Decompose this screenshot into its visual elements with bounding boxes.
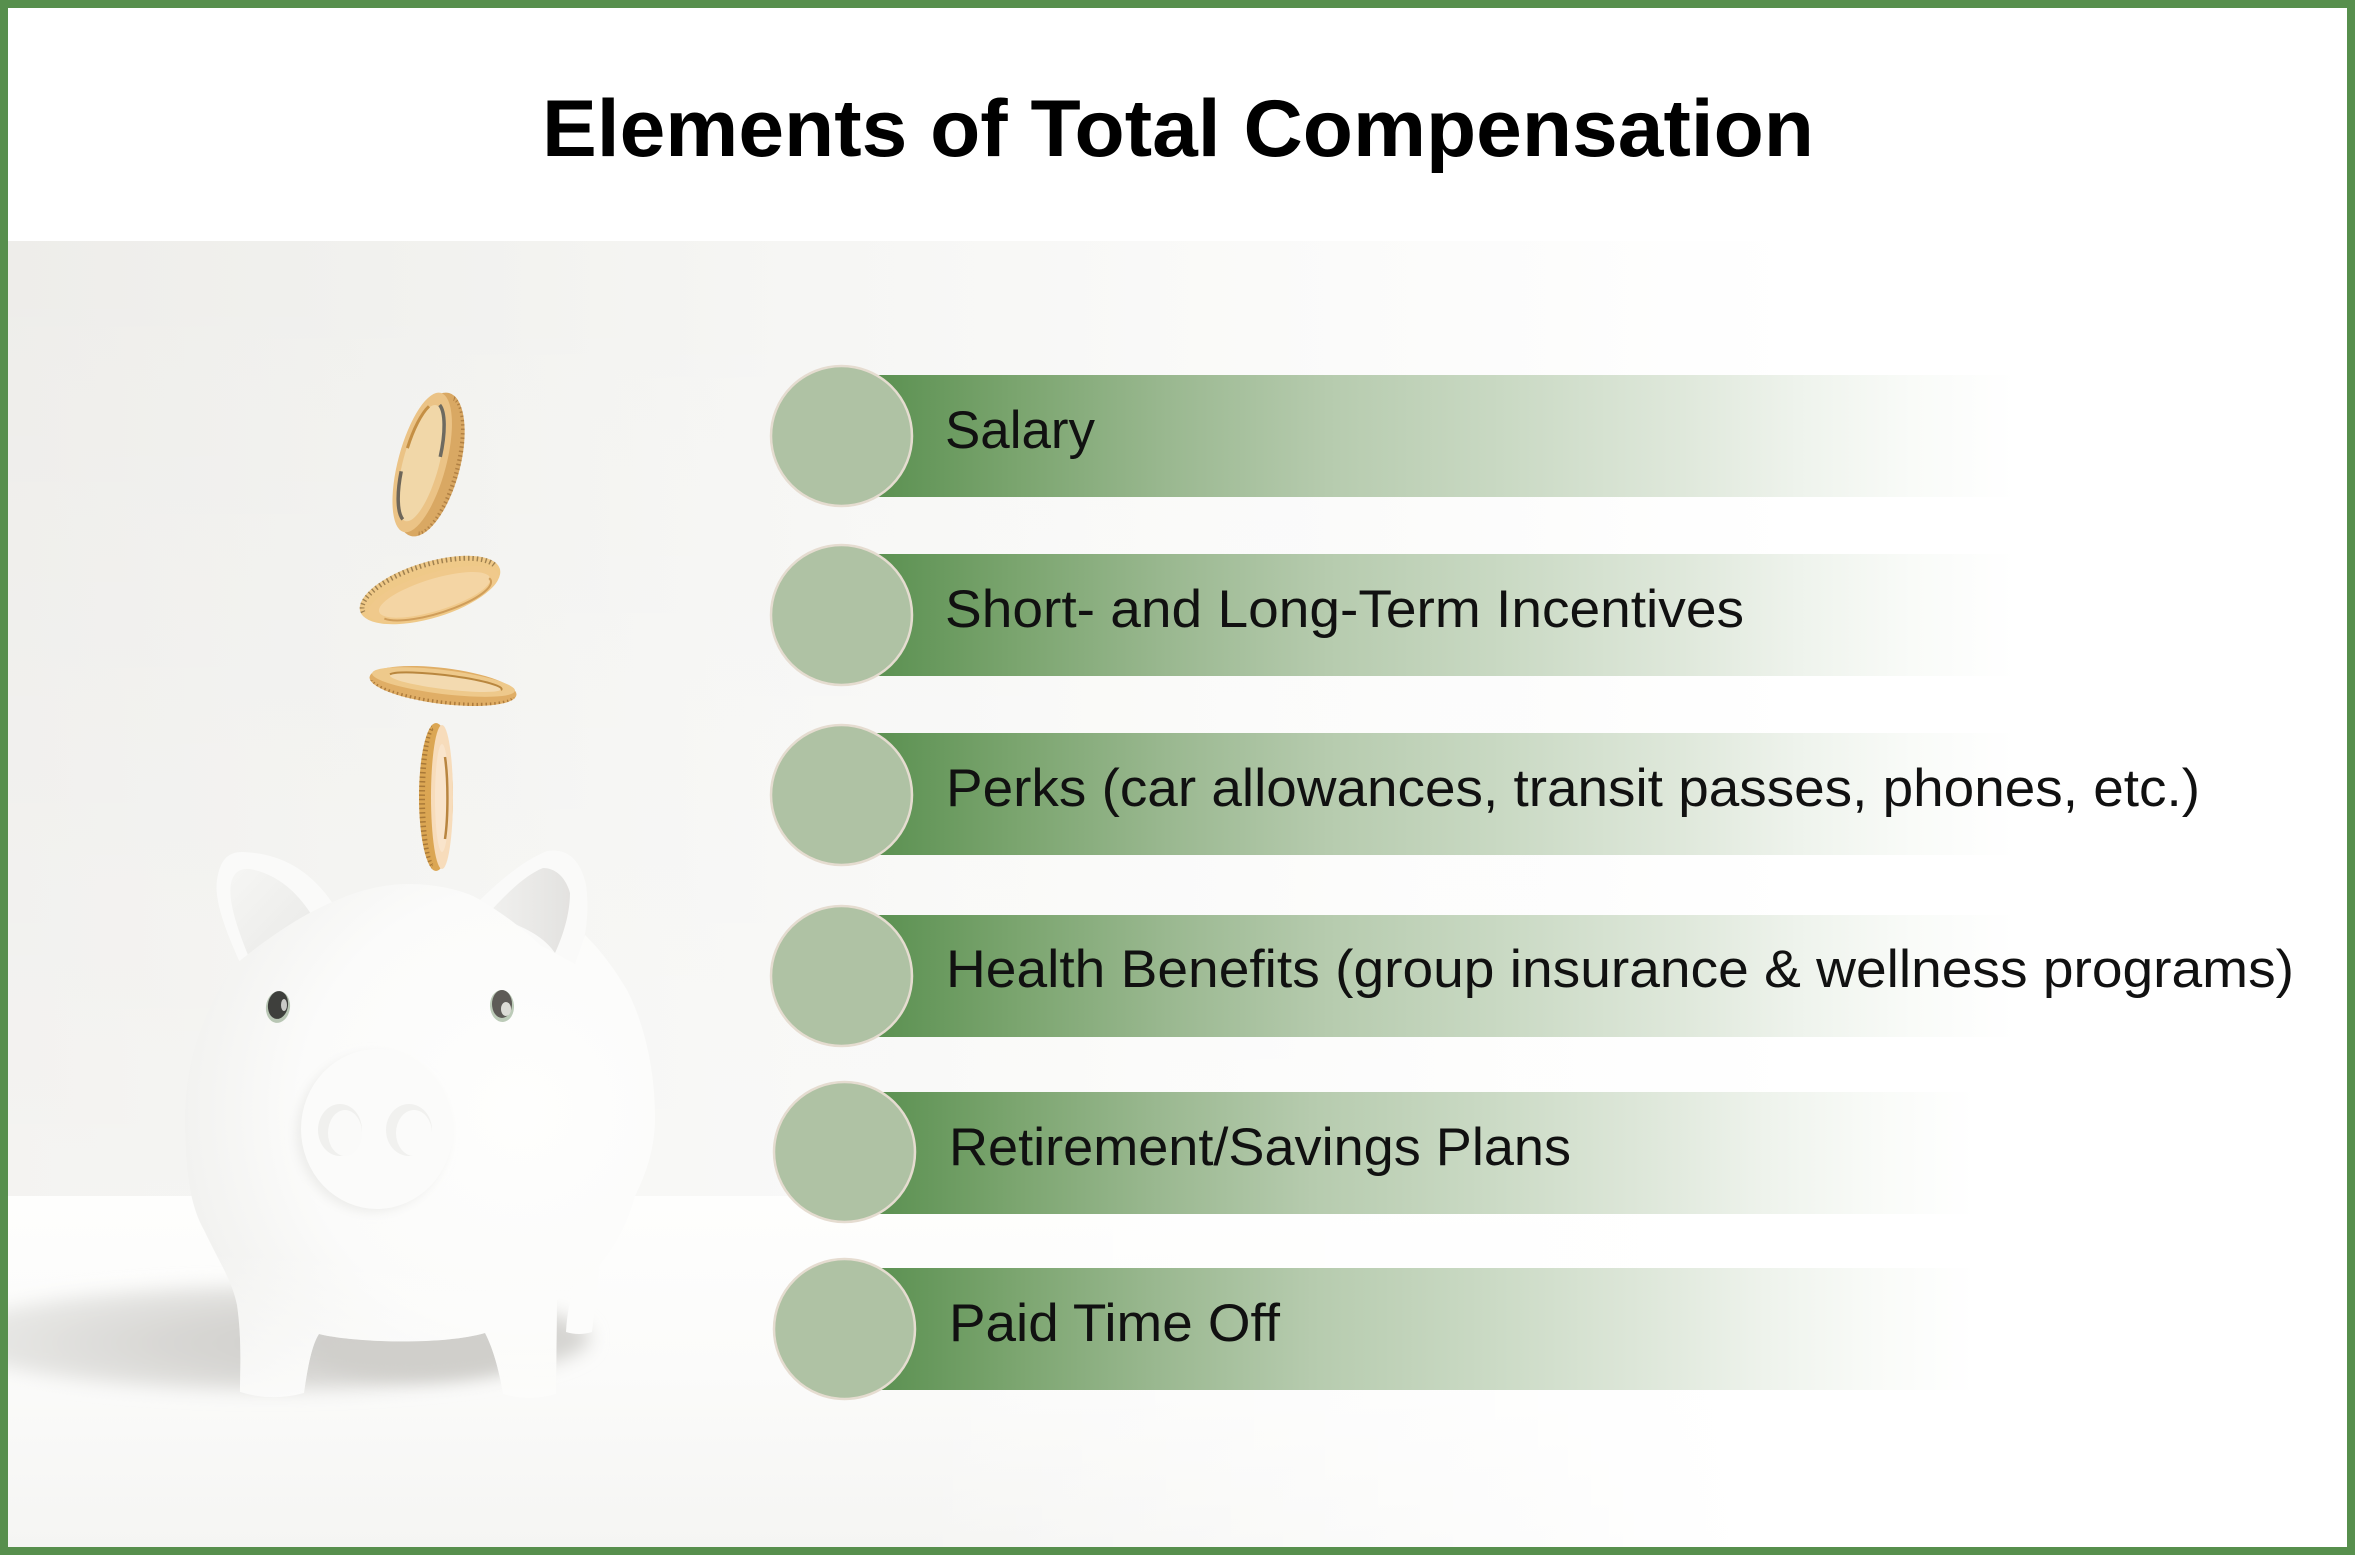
pig nostril left <box>318 1104 362 1156</box>
pig body <box>185 884 655 1398</box>
label: Salary <box>945 401 1095 460</box>
circle <box>774 1082 915 1222</box>
coin 1 <box>392 392 465 536</box>
pig right eye <box>489 989 515 1023</box>
label: Retirement/Savings Plans <box>949 1118 1571 1177</box>
illustration: falling coins <box>352 385 519 871</box>
gradient bar <box>840 554 2015 676</box>
circle <box>771 906 912 1046</box>
label: Health Benefits (group insurance & wellness programs) <box>946 940 2294 999</box>
illustration: piggy bank <box>185 850 655 1398</box>
pig left eye <box>264 989 292 1025</box>
row: Perks <box>771 725 2200 865</box>
coin 3 <box>370 666 516 706</box>
pig left ear <box>217 852 335 967</box>
gradient bar <box>840 733 2015 855</box>
row: Retirement/Savings Plans <box>774 1082 1975 1222</box>
circle <box>771 725 912 865</box>
row: Paid Time Off <box>774 1259 1975 1399</box>
label: Perks (car allowances, transit passes, phones, etc.) <box>946 759 2200 818</box>
pig back leg <box>566 1262 600 1334</box>
pig right ear <box>475 850 587 964</box>
gradient bar <box>840 1268 1975 1390</box>
pig floor shadow <box>0 1286 590 1390</box>
circle <box>771 545 912 685</box>
gradient bar <box>840 375 2015 497</box>
gradient bar <box>840 1092 1975 1214</box>
coin 2 <box>360 556 500 624</box>
title: Elements of Total Compensation <box>542 84 1814 174</box>
row: Short- and Long-Term Incentives <box>771 545 2015 685</box>
circle <box>771 366 912 506</box>
row: Health Benefits <box>771 906 2294 1046</box>
label: Short- and Long-Term Incentives <box>945 580 1744 639</box>
row: Salary <box>771 366 2015 506</box>
pig snout <box>296 1049 453 1212</box>
gradient bar <box>840 915 2015 1037</box>
label: Paid Time Off <box>949 1294 1280 1353</box>
coin 4 <box>419 723 453 871</box>
pig nostril right <box>386 1104 432 1156</box>
circle <box>774 1259 915 1399</box>
